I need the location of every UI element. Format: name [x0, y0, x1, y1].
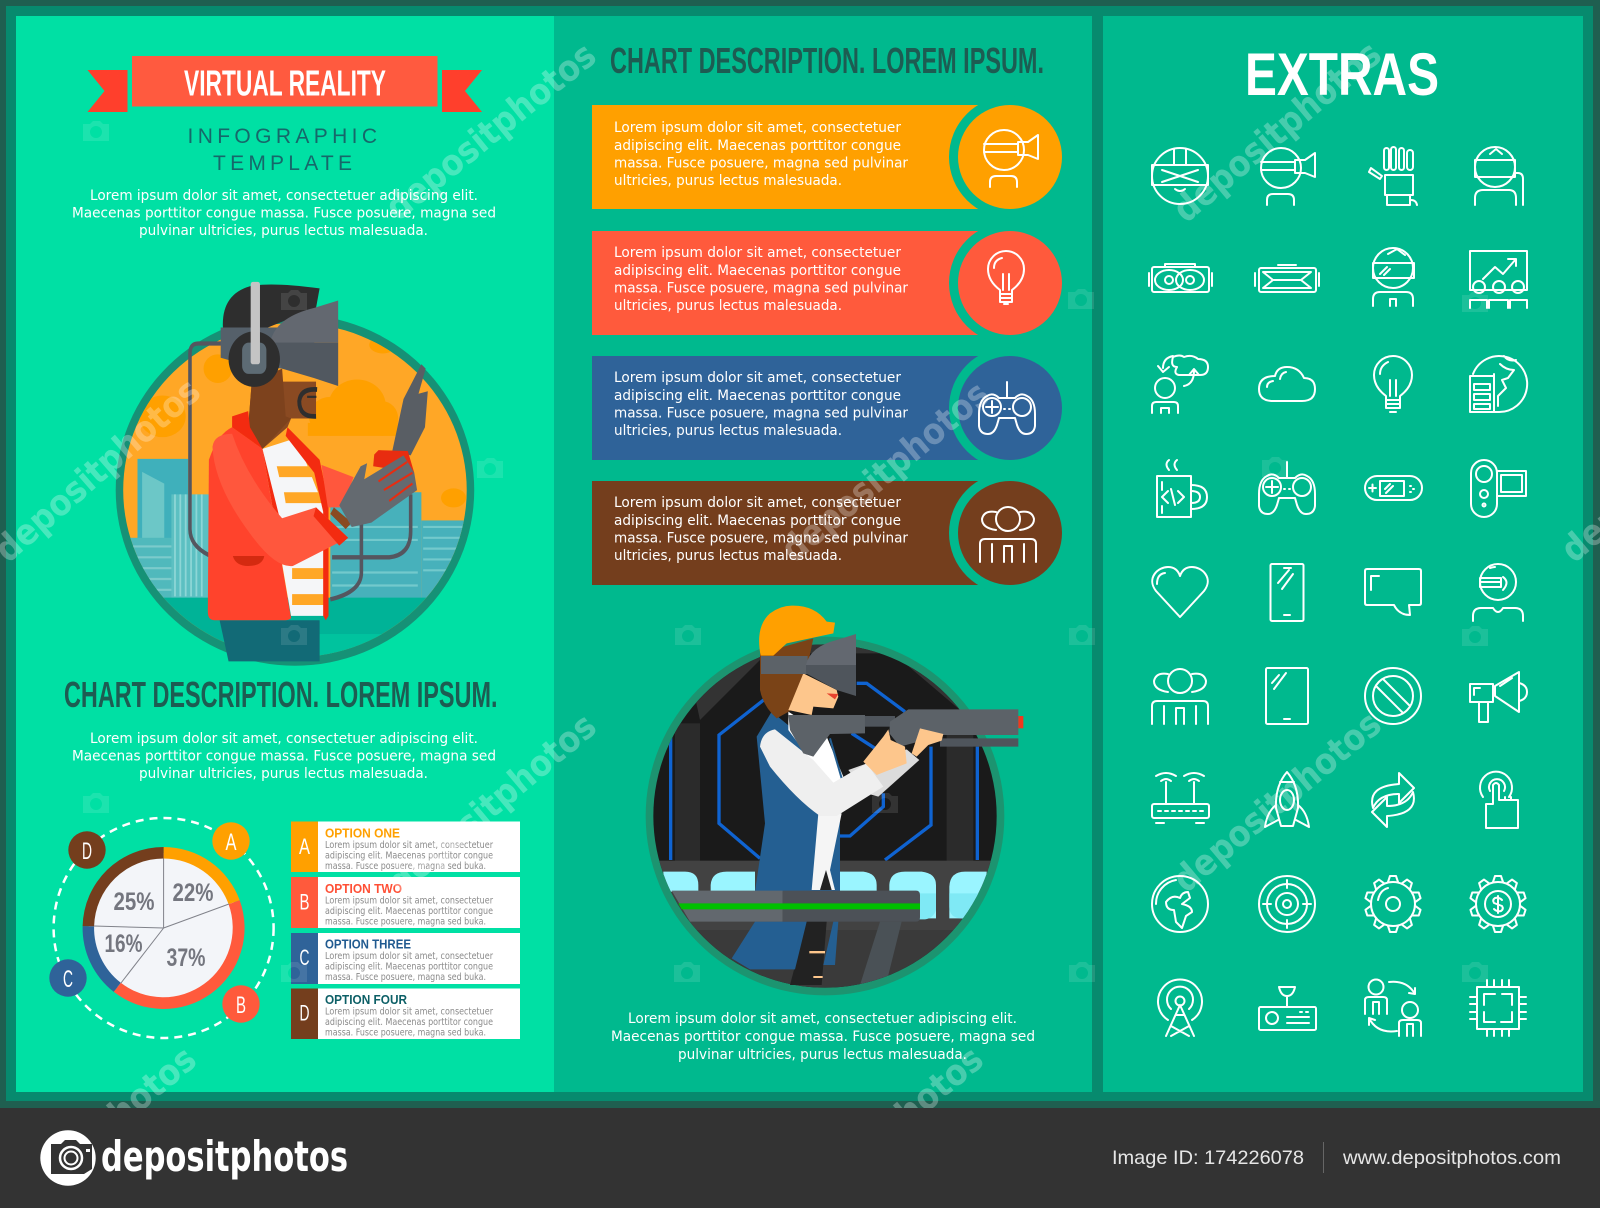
illustration: woman with VR and gun — [646, 606, 1023, 997]
coat — [755, 712, 840, 892]
raised glove — [392, 364, 428, 455]
intro text block — [72, 188, 496, 239]
badge: C: C — [63, 966, 73, 993]
subtitle: TEMPLATE — [213, 152, 352, 175]
icon: globe with server — [1470, 356, 1527, 412]
option two: adipiscing elit. Maecenas porttitor congue — [325, 906, 493, 917]
icon: touch — [1480, 772, 1518, 828]
watermarks: depositphotos — [1165, 34, 1389, 231]
title text: VIRTUAL REALITY — [184, 62, 386, 104]
intro text block: Maecenas porttitor congue massa. Fusce posuere, magna sed — [72, 206, 496, 222]
sci-fi room — [650, 640, 1003, 997]
option one — [291, 822, 520, 872]
icon: projector — [1259, 987, 1316, 1030]
website: www.depositphotos.com — [1342, 1147, 1561, 1169]
info bar: red: Lorem ipsum dolor sit amet, consectetuer — [614, 245, 901, 261]
info bar: red: massa. Fusce posuere, magna sed pulvinar — [614, 280, 908, 296]
info bar: orange: ultricies, purus lectus malesuada. — [614, 173, 842, 189]
extras heading: EXTRAS — [1245, 41, 1439, 108]
icon: gamepad — [1259, 462, 1315, 514]
chart text block: pulvinar ultricies, purus lectus malesuada. — [139, 766, 428, 782]
icon: camcorder — [1471, 460, 1526, 517]
intro text block: Lorem ipsum dolor sit amet, consectetuer adipiscing elit. — [90, 188, 478, 204]
subtitle: INFOGRAPHIC — [188, 125, 377, 148]
chart heading: left: CHART DESCRIPTION. LOREM IPSUM. — [64, 674, 498, 715]
bottom text block: Lorem ipsum dolor sit amet, consectetuer adipiscing elit. — [628, 1011, 1017, 1027]
option three: massa. Fusce posuere, magna sed buka. — [325, 972, 486, 983]
segment: B — [114, 900, 245, 1009]
city background — [123, 324, 467, 656]
icon grid — [1149, 147, 1527, 1036]
footer logo — [40, 1130, 348, 1186]
icon: heart — [1152, 567, 1208, 617]
option four: OPTION FOUR — [325, 993, 407, 1007]
icon: megaphone — [1470, 672, 1527, 722]
sleeves — [848, 749, 919, 797]
icon: VR head — [984, 130, 1038, 187]
icon: dollar gear — [1470, 876, 1526, 932]
percent labels: 25% — [114, 888, 154, 916]
gun — [788, 715, 865, 757]
icon: presentation — [1470, 251, 1527, 308]
helmet — [759, 606, 835, 656]
percent labels: 22% — [172, 879, 214, 907]
title banner — [88, 56, 482, 112]
icon: code mug — [1157, 460, 1207, 517]
segment: C — [83, 926, 121, 992]
watermarks: depositphotos — [773, 374, 997, 571]
badge: B — [222, 985, 260, 1023]
panel: left background — [16, 16, 554, 1092]
icon: bulb — [1374, 356, 1412, 412]
head and hair — [760, 638, 813, 718]
badge: D — [68, 831, 106, 869]
badge: C — [49, 959, 87, 997]
panel: middle background — [554, 16, 1092, 1092]
info bar: red: ultricies, purus lectus malesuada. — [614, 298, 842, 314]
dashed orbit — [54, 818, 274, 1038]
striped shirt — [262, 438, 326, 616]
option two: massa. Fusce posuere, magna sed buka. — [325, 916, 486, 928]
pie face — [89, 853, 239, 1003]
legs — [790, 922, 827, 985]
badge: B: B — [236, 992, 246, 1019]
icon: team — [1152, 669, 1208, 724]
option three: C — [300, 945, 310, 970]
icon: person head band — [1473, 564, 1523, 621]
info bar: orange: massa. Fusce posuere, magna sed pulvinar — [614, 156, 908, 172]
badge: A — [212, 822, 250, 860]
info bar: blue: ultricies, purus lectus malesuada. — [614, 423, 842, 439]
icon: phone — [1270, 564, 1304, 621]
option four: adipiscing elit. Maecenas porttitor congue — [325, 1017, 493, 1028]
subtitle — [188, 125, 377, 175]
option two — [291, 877, 520, 928]
info bar: orange: Lorem ipsum dolor sit amet, consectetuer — [614, 120, 901, 136]
bottom text block — [611, 1011, 1035, 1063]
option three: adipiscing elit. Maecenas porttitor congue — [325, 962, 493, 972]
icon: globe — [1152, 876, 1208, 932]
icon: gear — [1365, 876, 1421, 932]
option three: OPTION THREE — [325, 938, 411, 952]
footer logo: depositphotos — [101, 1132, 348, 1181]
info bar: red: adipiscing elit. Maecenas porttitor congue — [614, 263, 901, 279]
white shirt — [812, 813, 842, 890]
illustration: man with VR headset — [107, 282, 482, 677]
option four: Lorem ipsum dolor sit amet, consectetuer — [325, 1006, 493, 1018]
watermarks: depositphotos — [378, 35, 604, 229]
icon: VR person with cable — [1475, 147, 1523, 205]
bottom text block: Maecenas porttitor congue massa. Fusce posuere, magna sed — [611, 1029, 1035, 1045]
option one: OPTION ONE — [325, 826, 400, 840]
icon: router — [1152, 773, 1209, 823]
icon: target — [1259, 876, 1315, 932]
icon: light bulb — [988, 251, 1024, 304]
option three — [291, 933, 520, 984]
info bar: brown: massa. Fusce posuere, magna sed pulvinar — [614, 530, 908, 546]
option one: massa. Fusce posuere, magna sed buka. — [325, 861, 486, 872]
footer bar — [0, 1108, 1600, 1208]
icon: gamepad — [979, 382, 1035, 434]
headphones — [229, 331, 280, 387]
icon: VR front — [1152, 148, 1208, 204]
wristband — [314, 507, 348, 546]
panel: right background — [1103, 16, 1583, 1092]
intro text block: pulvinar ultricies, purus lectus malesuada. — [139, 223, 428, 239]
info bar: red — [592, 222, 1071, 344]
info bar: blue — [592, 347, 1071, 469]
info bar: orange: adipiscing elit. Maecenas porttitor congue — [614, 138, 901, 154]
option one: Lorem ipsum dolor sit amet, consectetuer — [325, 840, 493, 851]
hair — [223, 285, 320, 332]
info bar: orange — [592, 96, 1071, 218]
segment: D — [83, 847, 164, 926]
info bar: blue: adipiscing elit. Maecenas porttitor congue — [614, 388, 901, 404]
icon: goggles band — [1255, 265, 1319, 292]
percent labels — [104, 879, 214, 972]
info bar: brown: Lorem ipsum dolor sit amet, consectetuer — [614, 495, 901, 511]
icon: refresh arrows — [1372, 773, 1414, 827]
badge: D: D — [82, 838, 92, 865]
icon: team — [980, 507, 1036, 562]
icon: forbidden — [1365, 668, 1421, 724]
option four: D — [300, 1000, 310, 1026]
option four — [291, 988, 520, 1039]
chart text block: Lorem ipsum dolor sit amet, consectetuer adipiscing elit. — [90, 731, 478, 747]
neck and head — [248, 382, 316, 449]
pie chart — [49, 818, 274, 1038]
chart text block: Maecenas porttitor congue massa. Fusce posuere, magna sed — [72, 748, 496, 764]
icon: VR side — [1261, 148, 1315, 205]
circle ring — [116, 314, 474, 666]
chart heading: middle: CHART DESCRIPTION. LOREM IPSUM. — [610, 40, 1044, 81]
option four: massa. Fusce posuere, magna sed buka. — [325, 1028, 486, 1038]
option two: Lorem ipsum dolor sit amet, consectetuer — [325, 896, 493, 906]
icon: rocket — [1265, 772, 1309, 827]
front glove — [339, 455, 417, 527]
watermarks: depositphotos — [380, 706, 604, 903]
jeans — [220, 620, 320, 661]
beard — [299, 389, 317, 416]
chart text block — [72, 731, 496, 782]
info bar: blue: massa. Fusce posuere, magna sed pulvinar — [614, 406, 908, 422]
icon: chip — [1470, 980, 1526, 1036]
hands — [863, 729, 907, 775]
VR headset — [761, 656, 808, 674]
icon: handheld console — [1365, 476, 1422, 500]
info bar: blue: Lorem ipsum dolor sit amet, consectetuer — [614, 370, 901, 386]
table — [672, 891, 783, 922]
icon: chat bubble — [1365, 569, 1421, 615]
info bar: brown: ultricies, purus lectus malesuada. — [614, 548, 842, 564]
icon: tablet — [1266, 668, 1308, 724]
segment: A — [164, 847, 240, 904]
option two: B — [300, 890, 310, 914]
bottom text block: pulvinar ultricies, purus lectus malesuada. — [678, 1047, 967, 1063]
watermarks: depositphotos — [1165, 704, 1389, 901]
circle ring — [646, 637, 1004, 995]
info bar: brown — [592, 472, 1071, 594]
icon: VR glove — [1369, 147, 1417, 205]
badge: A: A — [226, 829, 236, 856]
icon: VR person — [1373, 248, 1414, 306]
icon: goggles lenses — [1149, 264, 1212, 292]
image id: Image ID: 174226078 — [1112, 1147, 1304, 1169]
cables — [190, 343, 411, 599]
icon: antenna — [1158, 980, 1202, 1036]
jacket — [208, 427, 291, 620]
option one: adipiscing elit. Maecenas porttitor congue — [325, 850, 493, 862]
VR headset — [221, 327, 314, 369]
percent labels: 37% — [166, 944, 206, 972]
info bar: brown: adipiscing elit. Maecenas porttitor congue — [614, 513, 901, 529]
option one: A — [299, 834, 310, 859]
option two: OPTION TWO — [325, 882, 402, 896]
option three: Lorem ipsum dolor sit amet, consectetuer — [325, 951, 493, 962]
icon: people exchange — [1365, 980, 1421, 1036]
icon: cloud — [1259, 367, 1315, 401]
icon: person with cloud — [1152, 356, 1208, 413]
percent labels: 16% — [104, 930, 142, 958]
